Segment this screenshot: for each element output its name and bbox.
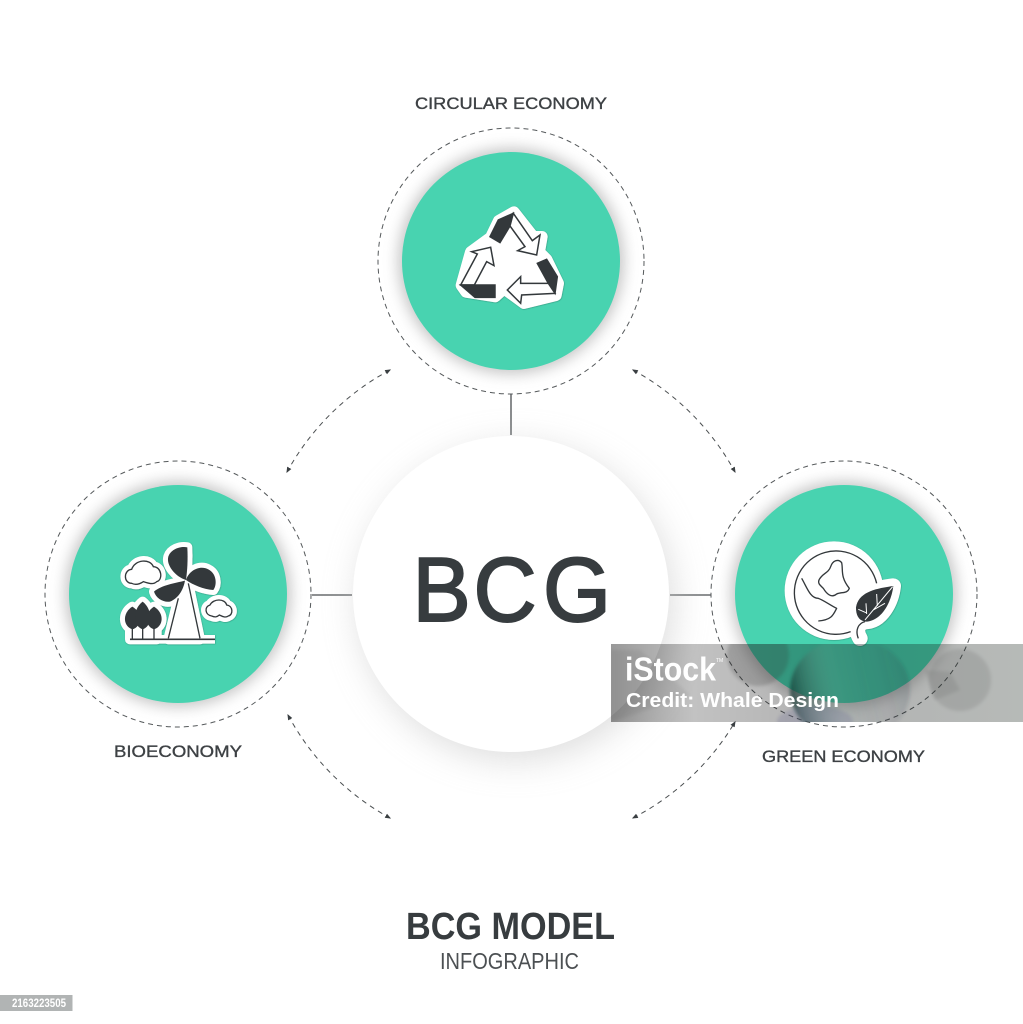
- central circle: BCG: B: [412, 538, 471, 640]
- icon: globe with leaf: [785, 541, 893, 640]
- watermark text: TM: [716, 658, 723, 664]
- central circle: BCG: G: [543, 538, 611, 640]
- central circle: BCG: C: [474, 538, 537, 640]
- watermark text: iStock: [625, 650, 717, 688]
- image id tag: 2163223505: [12, 998, 67, 1010]
- label: green economy: GREEN ECONOMY: [762, 747, 925, 766]
- watermark text: Credit: Whale Design: [626, 690, 839, 712]
- node: green economy: [711, 461, 977, 766]
- icon: recycle: [461, 212, 558, 303]
- image id tag: [0, 995, 72, 1011]
- label: circular economy: CIRCULAR ECONOMY: [415, 94, 607, 113]
- dashed two-way arrows: [287, 370, 735, 818]
- node: circular economy: [378, 94, 644, 394]
- icon: wind turbine, trees and clouds: [125, 547, 232, 639]
- node: bioeconomy: [45, 461, 311, 761]
- label: bioeconomy: BIOECONOMY: [114, 742, 242, 761]
- title: INFOGRAPHIC: [440, 948, 579, 974]
- watermark banner: [611, 644, 1023, 722]
- title: [406, 906, 615, 974]
- watermark text: [625, 650, 839, 712]
- title: BCG MODEL: [406, 906, 615, 948]
- connector lines: [312, 394, 711, 595]
- central circle: BCG: [353, 436, 674, 761]
